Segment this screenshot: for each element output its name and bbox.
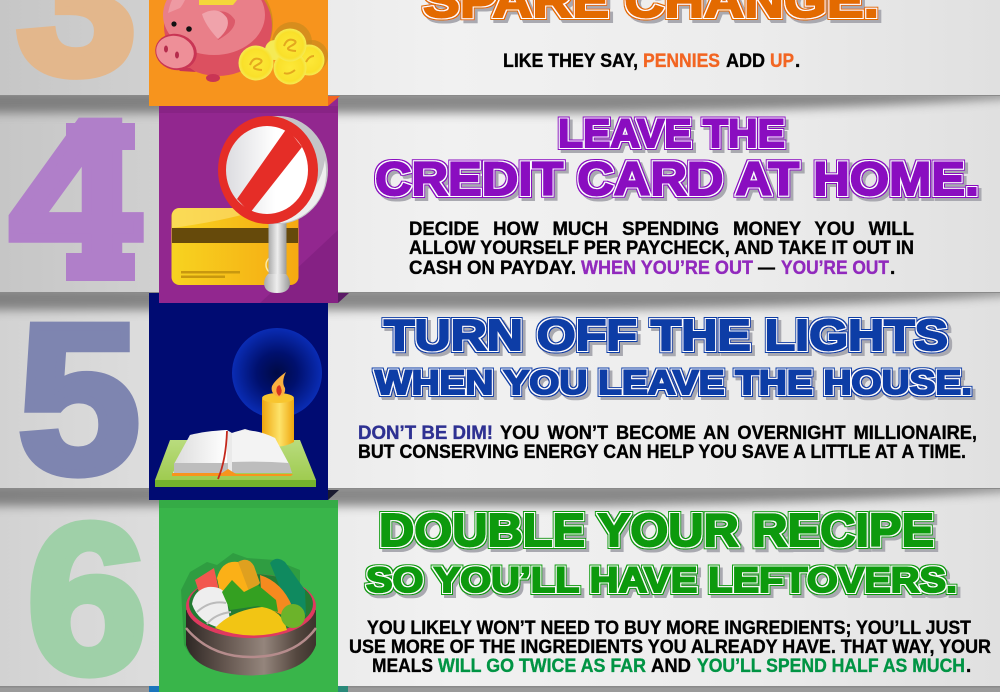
body: ingredients (349, 618, 991, 677)
icon tile: credit card and no sign (159, 96, 349, 303)
heading: turn off the lights: TURN OFF THE LIGHTS (384, 311, 948, 360)
body: dont be dim (358, 423, 977, 463)
heading: credit card at home: CREDIT CARD AT HOME. (375, 152, 979, 205)
panel: tip 3 spare change (0, 0, 1000, 118)
heading: double your recipe: DOUBLE YOUR RECIPE (379, 504, 934, 556)
body: dont be dim: BUT CONSERVING ENERGY CAN HELP YOU SAVE A LITTLE AT A TIME. (358, 442, 966, 463)
body: ingredients: YOU LIKELY WON’T NEED TO BUY MORE INGREDIENTS; YOU’LL JUST (367, 618, 971, 639)
body: pennies add up: ADD (726, 51, 765, 72)
body: spending money (409, 219, 914, 279)
panel: tip 5 lights (0, 293, 1000, 489)
body: dont be dim: YOU WON’T BECOME AN OVERNIGHT MILLIONAIRE, (500, 423, 977, 444)
body: spending money: YOU’RE OUT (781, 258, 889, 279)
food (195, 568, 219, 595)
body: dont be dim: DON’T BE DIM! (358, 423, 493, 444)
body: ingredients: WILL GO TWICE AS FAR (438, 656, 646, 677)
body: ingredients: . (966, 656, 971, 677)
body: pennies add up (503, 51, 800, 72)
body: pennies add up: PENNIES (643, 51, 720, 72)
candle glow (232, 328, 322, 418)
body: ingredients: AND (651, 656, 691, 677)
number 4: 4 (10, 76, 140, 313)
panel: tip 6 recipe (0, 480, 1000, 692)
body: spending money: . (890, 258, 895, 279)
body: ingredients: MEALS (372, 656, 433, 677)
candle (262, 372, 294, 446)
body: spending money: DECIDE HOW MUCH SPENDING MONEY YOU WILL (409, 219, 914, 240)
next tip strip (149, 686, 348, 692)
gold coins (238, 22, 328, 84)
credit card (172, 208, 298, 285)
body: spending money: CASH ON PAYDAY. (409, 258, 576, 279)
body: pennies add up: UP (770, 51, 794, 72)
body: pennies add up: LIKE THEY SAY, (503, 51, 638, 72)
body: pennies add up: . (795, 51, 800, 72)
number 5: 5 (18, 280, 140, 517)
open book (172, 429, 293, 479)
heading: leave the: LEAVE THE (558, 112, 785, 156)
icon tile: food bowl (159, 500, 338, 692)
no entry sign (218, 116, 328, 293)
piggy bank (151, 0, 273, 82)
table (155, 440, 316, 487)
panel: tip 4 credit card (0, 96, 1000, 293)
heading: so you'll have leftovers: SO YOU’LL HAVE LEFTOVERS. (366, 561, 957, 600)
icon tile: piggy bank and coins (149, 0, 340, 106)
bowl (186, 559, 316, 676)
body: ingredients: YOU’LL SPEND HALF AS MUCH (697, 656, 965, 677)
body: spending money: — (758, 258, 775, 279)
body: spending money: ALLOW YOURSELF PER PAYCHECK, AND TAKE IT OUT IN (409, 238, 914, 259)
icon tile: candle and book (149, 293, 339, 500)
body: spending money: WHEN YOU’RE OUT (581, 258, 753, 279)
heading: when you leave the house: WHEN YOU LEAVE THE HOUSE. (375, 364, 972, 402)
